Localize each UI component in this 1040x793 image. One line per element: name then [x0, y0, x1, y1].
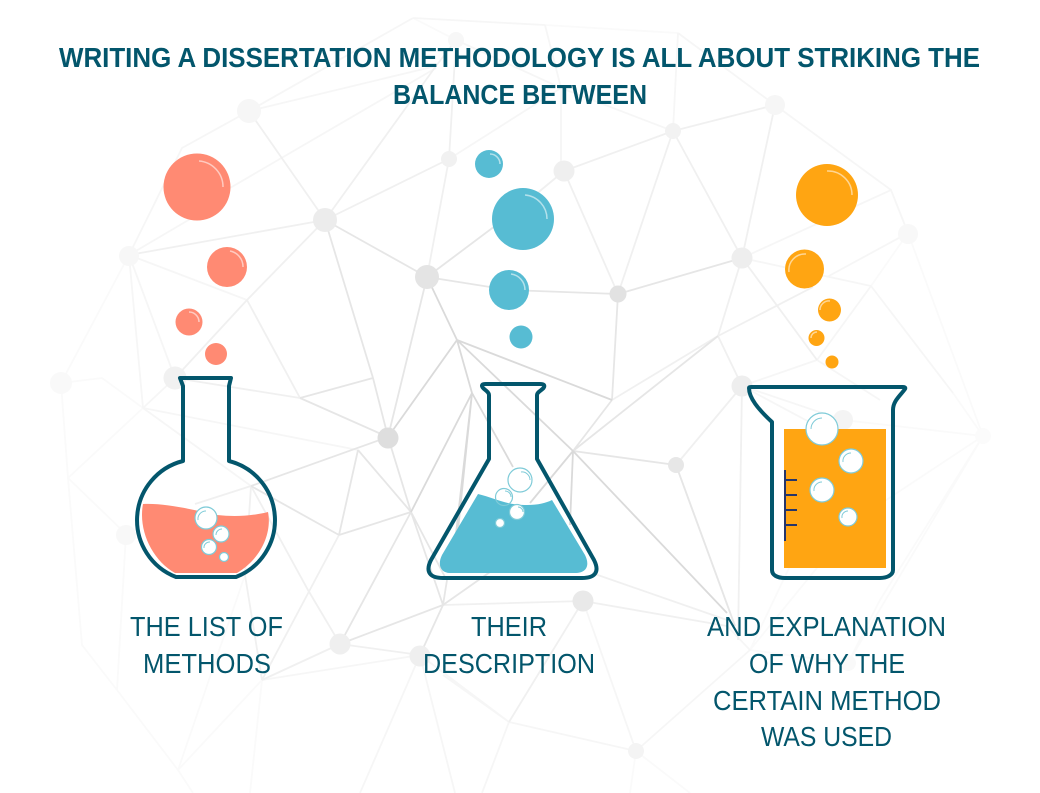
column: explanation of why the method was used	[707, 164, 946, 752]
rising coral bubbles	[164, 154, 247, 365]
label: and explanation of why the certain method was used: CERTAIN METHOD	[713, 685, 941, 716]
title: WRITING A DISSERTATION METHODOLOGY IS ALL ABOUT STRIKING THE	[59, 42, 980, 73]
label: and explanation of why the certain method was used: OF WHY THE	[749, 648, 905, 679]
label: their description: THEIR	[471, 611, 547, 642]
round-bottom flask	[137, 378, 275, 577]
label: their description	[423, 611, 595, 679]
beaker	[749, 387, 905, 578]
title: BALANCE BETWEEN	[393, 79, 647, 110]
label: the list of methods: METHODS	[143, 648, 271, 679]
conical flask	[428, 384, 597, 578]
rising orange bubbles	[785, 164, 858, 368]
label: the list of methods: THE LIST OF	[130, 611, 283, 642]
label: and explanation of why the certain method was used	[707, 611, 946, 752]
label: and explanation of why the certain method was used: AND EXPLANATION	[707, 611, 946, 642]
label: the list of methods	[130, 611, 283, 679]
title	[59, 42, 980, 110]
label: their description: DESCRIPTION	[423, 648, 595, 679]
column: their description	[423, 150, 597, 679]
rising blue bubbles	[475, 150, 554, 348]
column: the list of methods	[130, 154, 283, 679]
label: and explanation of why the certain method was used: WAS USED	[761, 721, 892, 752]
